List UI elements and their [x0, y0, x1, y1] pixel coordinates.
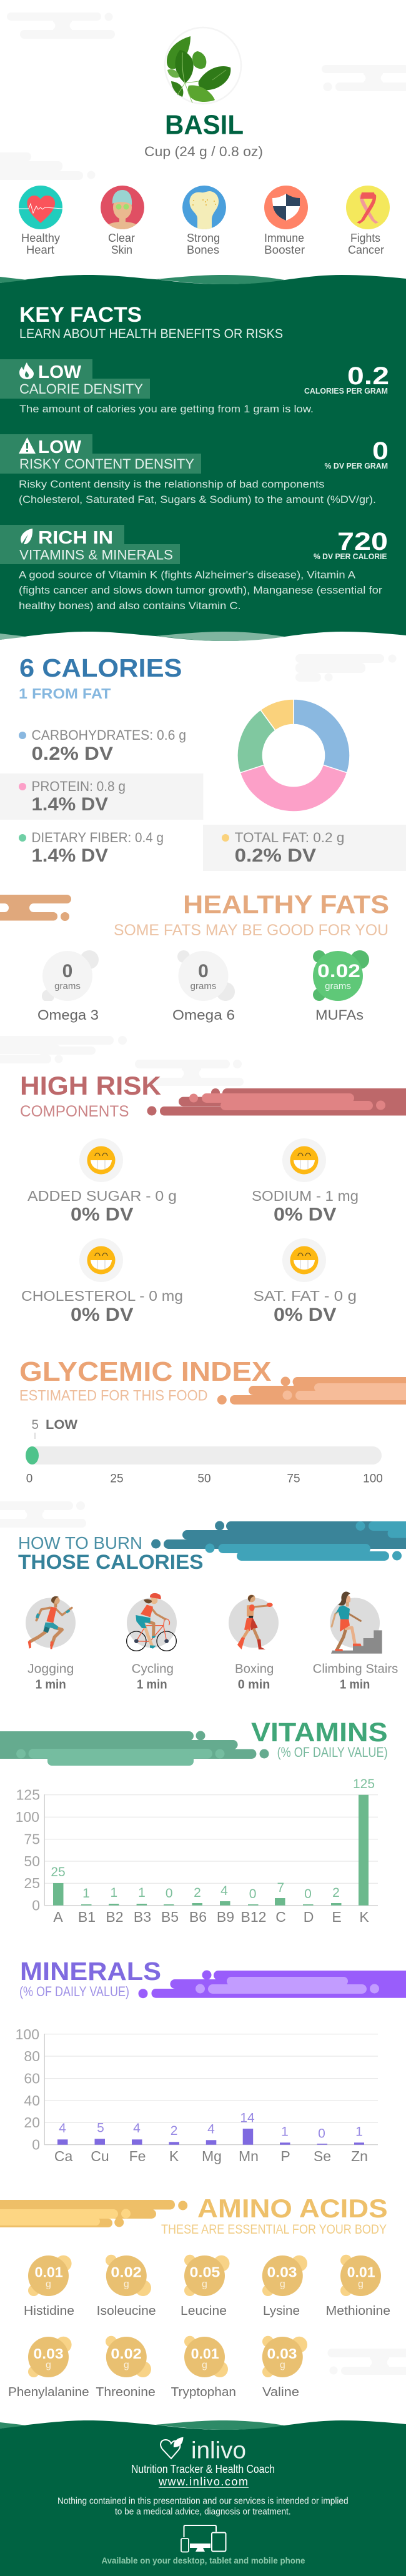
bar chart: minerals: 4: [207, 2122, 215, 2137]
bar chart: vitamins: 4: [220, 1884, 228, 1898]
bar chart: minerals: Fe: [129, 2148, 146, 2164]
fact: risky content density: (Cholesterol, Saturated Fat, Sugars & Sodium) to the amount (%DV/gr).: [19, 494, 376, 505]
fact: risky content density: 0: [372, 437, 389, 465]
bar chart: minerals: Zn: [351, 2148, 368, 2164]
banner graphic: [0, 895, 73, 921]
icon: devices: [181, 2525, 226, 2552]
bar chart: vitamins: B5: [161, 1909, 179, 1925]
icon: flame: [19, 362, 34, 379]
legend: total fat: [222, 830, 344, 866]
banner graphic: [0, 1731, 269, 1766]
activity: climbing stairs: [313, 1592, 398, 1692]
amino: valine: Valine: [262, 2385, 299, 2399]
amino: lysine: g: [280, 2279, 285, 2289]
amino: histidine: g: [46, 2279, 51, 2289]
fact: risky content density: % DV PER GRAM: [325, 462, 388, 470]
amino: methionine: 0.01: [347, 2264, 375, 2280]
subheading: SOME FATS MAY BE GOOD FOR YOU: [114, 922, 389, 939]
bar chart: minerals: 4: [133, 2121, 141, 2136]
activity: cycling: [127, 1593, 177, 1692]
heading: glycemic index: GLYCEMIC INDEX: [19, 1356, 272, 1387]
heading: high risk: HIGH RISK: [20, 1071, 161, 1100]
stat: omega 3: Omega 3: [37, 1007, 99, 1023]
amino: tryptophan: Tryptophan: [171, 2385, 236, 2399]
bar chart: vitamins: 0: [166, 1886, 173, 1901]
bar chart: vitamins: A: [53, 1909, 63, 1925]
subheading: LEARN ABOUT HEALTH BENEFITS OR RISKS: [19, 327, 283, 341]
bar chart: vitamins: 1: [82, 1886, 90, 1901]
panel: health benefits: [19, 186, 390, 256]
bar chart: minerals: 2: [171, 2124, 177, 2138]
stat: omega 3: [37, 950, 99, 1023]
logo wordmark: inlivo: [191, 2438, 246, 2464]
disclaimer: [57, 2496, 349, 2517]
website: www.inlivo.com: [158, 2475, 248, 2488]
bar chart: vitamins: B6: [189, 1909, 207, 1925]
bar chart: minerals: 5: [97, 2121, 104, 2136]
label: strong bones: [187, 232, 220, 256]
fact: calorie density: [0, 359, 389, 415]
activity: jogging: [26, 1596, 76, 1692]
label: clear skin: [108, 232, 135, 256]
label: fights cancer: Cancer: [348, 244, 384, 256]
legend: dietary fiber: [19, 830, 164, 866]
bar chart: vitamins: 7: [277, 1881, 284, 1895]
heading: healthy fats: HEALTHY FATS: [183, 890, 389, 918]
item: saturated fat: SAT. FAT - 0 g: [254, 1288, 357, 1304]
panel: calories: [0, 654, 406, 871]
subheading: from fat: 1 FROM FAT: [19, 685, 111, 702]
bar chart: vitamins: 50: [24, 1853, 40, 1869]
banner graphic: [0, 2200, 187, 2227]
heading: key facts: KEY FACTS: [19, 303, 142, 327]
amino: lysine: 0.03: [267, 2264, 297, 2280]
fact: rich in vitamins and minerals: VITAMINS & MINERALS: [19, 547, 173, 562]
amino: phenylalanine: g: [46, 2360, 51, 2370]
bar chart: minerals: 60: [24, 2071, 40, 2087]
bar chart: vitamins: B1: [78, 1909, 96, 1925]
bar chart: vitamins: [16, 1777, 378, 1925]
label: clear skin: Skin: [111, 244, 132, 256]
amino: leucine: Leucine: [181, 2304, 227, 2318]
bar chart: minerals: Mn: [239, 2148, 259, 2164]
icon: stair climber: [330, 1592, 382, 1654]
bar chart: vitamins: B9: [217, 1909, 234, 1925]
item: added sugar: ADDED SUGAR - 0 g: [27, 1188, 177, 1204]
activity: climbing stairs: 1 min: [340, 1678, 370, 1692]
legend: dietary fiber: 1.4% DV: [31, 845, 108, 866]
heading: 6 calories: 6 CALORIES: [19, 654, 182, 682]
fact: rich in vitamins and minerals: [0, 525, 388, 612]
amino: leucine: g: [202, 2279, 207, 2289]
amino: threonine: 0.02: [111, 2345, 142, 2362]
item: saturated fat: [254, 1238, 357, 1325]
fact: rich in vitamins and minerals: RICH IN: [38, 528, 113, 548]
stat: mufas: [313, 950, 369, 1023]
bar chart: vitamins: 2: [332, 1886, 340, 1900]
banner graphic: [147, 1088, 406, 1116]
donut chart: [237, 699, 350, 812]
fact: rich in vitamins and minerals: healthy bones) and also contains Vitamin C.: [19, 600, 241, 612]
amino: methionine: g: [358, 2279, 364, 2289]
bar chart: minerals: Se: [314, 2148, 331, 2164]
label: immune booster: Booster: [264, 244, 305, 256]
amino: valine: 0.03: [267, 2345, 297, 2362]
panel: minerals: [16, 1957, 406, 2164]
amino: threonine: [96, 2336, 156, 2399]
icon: immune booster: [264, 186, 308, 229]
icon: grin face: [282, 1238, 326, 1282]
amino: phenylalanine: 0.03: [34, 2345, 64, 2362]
stat: mufas: MUFAs: [315, 1007, 364, 1023]
bar chart: vitamins: 25: [51, 1865, 66, 1879]
tagline: Nutrition Tracker & Health Coach: [131, 2463, 275, 2475]
bar chart: vitamins: E: [332, 1909, 342, 1925]
legend: dietary fiber: DIETARY FIBER: 0.4 g: [31, 830, 164, 845]
fact: calorie density: LOW: [38, 362, 82, 382]
activity: cycling: 1 min: [137, 1678, 167, 1692]
banner graphic: [151, 1521, 406, 1561]
icon: basil photo: [165, 27, 241, 104]
gauge: value label: 5: [31, 1418, 39, 1432]
item: sodium: SODIUM - 1 mg: [252, 1188, 359, 1204]
gauge: scale: 50: [197, 1472, 211, 1486]
availability note: Available on your desktop, tablet and mobile phone: [101, 2555, 305, 2565]
panel: footer: [0, 2420, 406, 2576]
amino: isoleucine: Isoleucine: [97, 2304, 156, 2318]
amino: histidine: Histidine: [24, 2304, 74, 2318]
bar chart: vitamins: 75: [24, 1831, 40, 1847]
subheading: ESTIMATED FOR THIS FOOD: [19, 1388, 207, 1405]
fact: rich in vitamins and minerals: % DV PER CALORIE: [314, 552, 387, 561]
icon: clear skin: [101, 186, 144, 229]
bar chart: vitamins: 25: [24, 1875, 40, 1891]
item: saturated fat: 0% DV: [274, 1305, 336, 1325]
bar chart: vitamins: 0: [32, 1897, 40, 1913]
banner graphic: [139, 1971, 406, 1998]
stat: omega 3: grams: [54, 981, 81, 992]
stat: mufas: grams: [325, 981, 351, 992]
gauge: value label: [31, 1418, 77, 1439]
amino: histidine: [24, 2255, 74, 2318]
amino: isoleucine: g: [124, 2279, 129, 2289]
legend: protein: [19, 778, 126, 815]
bar chart: minerals: Mg: [202, 2148, 222, 2164]
amino: methionine: [326, 2255, 390, 2318]
bar chart: minerals: 1: [281, 2125, 289, 2139]
bar chart: minerals: K: [169, 2148, 179, 2164]
amino: valine: [262, 2336, 307, 2399]
bar chart: vitamins: 0: [249, 1887, 256, 1901]
legend: total fat: TOTAL FAT: 0.2 g: [235, 830, 344, 845]
activity: boxing: Boxing: [235, 1662, 274, 1676]
panel: high risk components: [20, 1071, 406, 1325]
activity: boxing: [229, 1594, 279, 1692]
icon: boxer: [229, 1594, 279, 1649]
legend: carbohydrates: 0.2% DV: [31, 743, 113, 764]
label: immune booster: Immune: [264, 232, 304, 244]
stat: omega 6: 0: [198, 961, 209, 982]
fact: calorie density: CALORIES PER GRAM: [304, 387, 388, 395]
bar chart: minerals: 0: [318, 2127, 325, 2141]
bar chart: minerals: Cu: [91, 2148, 109, 2164]
legend: protein: PROTEIN: 0.8 g: [31, 778, 126, 794]
heading: those calories: THOSE CALORIES: [18, 1551, 204, 1573]
panel: glycemic index: [19, 1356, 406, 1486]
amino: tryptophan: 0.01: [191, 2345, 219, 2362]
icon: cyclist: [127, 1593, 177, 1651]
amino: leucine: [181, 2255, 230, 2318]
amino: methionine: Methionine: [326, 2304, 390, 2318]
bar chart: minerals: Ca: [54, 2148, 73, 2164]
icon: strong bones: [182, 186, 226, 231]
item: cholesterol: CHOLESTEROL - 0 mg: [21, 1288, 183, 1304]
stat: omega 6: [172, 950, 235, 1023]
amino: leucine: 0.05: [190, 2264, 220, 2280]
heading: amino acids: AMINO ACIDS: [197, 2194, 388, 2223]
item: added sugar: [27, 1138, 177, 1225]
panel: key facts: [0, 275, 406, 650]
amino: phenylalanine: [8, 2337, 89, 2399]
item: cholesterol: 0% DV: [71, 1305, 134, 1325]
activity: cycling: Cycling: [132, 1662, 174, 1676]
bar chart: minerals: 1: [355, 2125, 363, 2139]
amino: tryptophan: g: [202, 2360, 207, 2370]
bar chart: minerals: 0: [32, 2137, 40, 2153]
panel: healthy fats: [0, 890, 389, 1023]
activity: jogging: 1 min: [36, 1678, 66, 1692]
subheading: (% OF DAILY VALUE): [19, 1984, 129, 1999]
disclaimer: Nothing contained in this presentation and our services is intended or implied: [57, 2496, 349, 2506]
amino: isoleucine: [97, 2255, 156, 2318]
gauge: scale: 25: [110, 1472, 124, 1486]
legend: carbohydrates: CARBOHYDRATES: 0.6 g: [31, 727, 186, 743]
bar chart: minerals: 100: [16, 2026, 39, 2042]
icon: grin face: [282, 1138, 326, 1182]
label: healthy heart: [21, 232, 60, 256]
gauge: scale: 75: [287, 1472, 300, 1486]
amino: threonine: g: [124, 2360, 129, 2370]
icon: inlivo logo: [161, 2437, 184, 2459]
label: healthy heart: Healthy: [21, 232, 60, 244]
bar chart: vitamins: B3: [134, 1909, 151, 1925]
heading: how to burn: HOW TO BURN: [18, 1533, 142, 1553]
activity: boxing: 0 min: [238, 1678, 270, 1692]
bar chart: vitamins: 0: [304, 1887, 312, 1901]
stat: omega 6: grams: [191, 981, 216, 992]
legend: carbohydrates: [19, 727, 186, 764]
icon: grin face: [79, 1138, 123, 1182]
fact: risky content density: LOW: [38, 437, 82, 457]
amino: histidine: 0.01: [35, 2264, 63, 2280]
header: basil: [144, 27, 263, 159]
icon: fights cancer: [346, 186, 390, 229]
bar chart: vitamins: 100: [16, 1809, 39, 1825]
bar chart: minerals: P: [280, 2148, 290, 2164]
bar chart: vitamins: B12: [241, 1909, 266, 1925]
item: sodium: [252, 1138, 359, 1225]
label: clear skin: Clear: [108, 232, 135, 244]
fact: calorie density: 0.2: [347, 362, 389, 390]
gauge: scale: 0: [26, 1472, 32, 1486]
fact: risky content density: Risky Content density is the relationship of bad components: [19, 479, 325, 490]
bar chart: minerals: 40: [24, 2092, 40, 2109]
item: cholesterol: [21, 1238, 183, 1325]
amino: valine: g: [280, 2360, 285, 2370]
banner graphic: [217, 1377, 406, 1405]
legend: total fat: 0.2% DV: [235, 845, 316, 866]
icon: warning triangle: [19, 437, 36, 454]
amino: lysine: Lysine: [263, 2304, 300, 2318]
bar chart: vitamins: 2: [194, 1886, 201, 1900]
bar chart: vitamins: K: [359, 1909, 369, 1925]
amino: phenylalanine: Phenylalanine: [8, 2385, 89, 2399]
label: fights cancer: [348, 232, 384, 256]
bar chart: vitamins: 1: [138, 1886, 146, 1900]
gauge: track and marker: [26, 1446, 382, 1465]
panel: amino acids: [0, 2194, 390, 2399]
bar chart: minerals: 80: [24, 2048, 40, 2064]
stat: omega 6: Omega 6: [172, 1007, 235, 1023]
fact: risky content density: RISKY CONTENT DENSITY: [19, 456, 194, 472]
item: added sugar: 0% DV: [71, 1205, 134, 1225]
stat: mufas: 0.02: [317, 961, 360, 982]
gauge: scale: [26, 1472, 383, 1486]
stat: omega 3: 0: [62, 961, 72, 982]
bar chart: minerals: 14: [240, 2111, 255, 2126]
heading: vitamins: VITAMINS: [251, 1718, 388, 1748]
fact: calorie density: The amount of calories you are getting from 1 gram is low.: [19, 403, 314, 415]
icon: jogger: [26, 1596, 76, 1649]
icon: healthy heart: [19, 186, 62, 229]
label: healthy heart: Heart: [26, 244, 54, 256]
legend: protein: 1.4% DV: [31, 794, 108, 815]
activity: jogging: Jogging: [27, 1662, 74, 1676]
gauge: scale: 100: [363, 1472, 383, 1486]
bar chart: minerals: 4: [59, 2121, 66, 2136]
amino: isoleucine: 0.02: [111, 2264, 142, 2280]
fact: calorie density: CALORIE DENSITY: [19, 381, 143, 397]
amino: threonine: Threonine: [96, 2385, 156, 2399]
bar chart: minerals: [16, 2026, 378, 2164]
panel: vitamins: [0, 1718, 388, 1925]
label: immune booster: [264, 232, 305, 256]
bar chart: vitamins: C: [275, 1909, 286, 1925]
label: strong bones: Bones: [187, 244, 219, 256]
bar chart: minerals: 20: [24, 2114, 40, 2131]
panel: how to burn those calories: [18, 1521, 406, 1692]
label: strong bones: Strong: [187, 232, 220, 244]
subheading: COMPONENTS: [20, 1103, 129, 1120]
activity: climbing stairs: Climbing Stairs: [313, 1662, 398, 1676]
bar chart: vitamins: D: [304, 1909, 314, 1925]
title: BASIL: [165, 110, 244, 140]
icon: leaf: [21, 529, 32, 544]
bar chart: vitamins: B2: [106, 1909, 124, 1925]
fact: rich in vitamins and minerals: A good source of Vitamin K (fights Alzheimer's disease), Vitamin A: [19, 569, 356, 581]
bar chart: vitamins: 1: [111, 1886, 117, 1900]
amino: lysine: [262, 2255, 307, 2318]
amino: tryptophan: [171, 2336, 236, 2399]
item: sodium: 0% DV: [274, 1205, 336, 1225]
bar chart: vitamins: 125: [16, 1787, 40, 1803]
fact: rich in vitamins and minerals: (fights cancer and slows down tumor growth), Manganese (essential for: [19, 584, 382, 596]
icon: grin face: [79, 1238, 123, 1282]
bar chart: vitamins: 125: [353, 1777, 375, 1791]
label: fights cancer: Fights: [350, 232, 380, 244]
gauge: value label: LOW: [46, 1418, 77, 1432]
disclaimer: to be a medical advice, diagnosis or treatment.: [115, 2507, 291, 2517]
fact: risky content density: [0, 434, 389, 505]
fact: rich in vitamins and minerals: 720: [337, 528, 388, 555]
serving size: Cup (24 g / 0.8 oz): [144, 144, 263, 159]
heading: minerals: MINERALS: [20, 1957, 161, 1986]
